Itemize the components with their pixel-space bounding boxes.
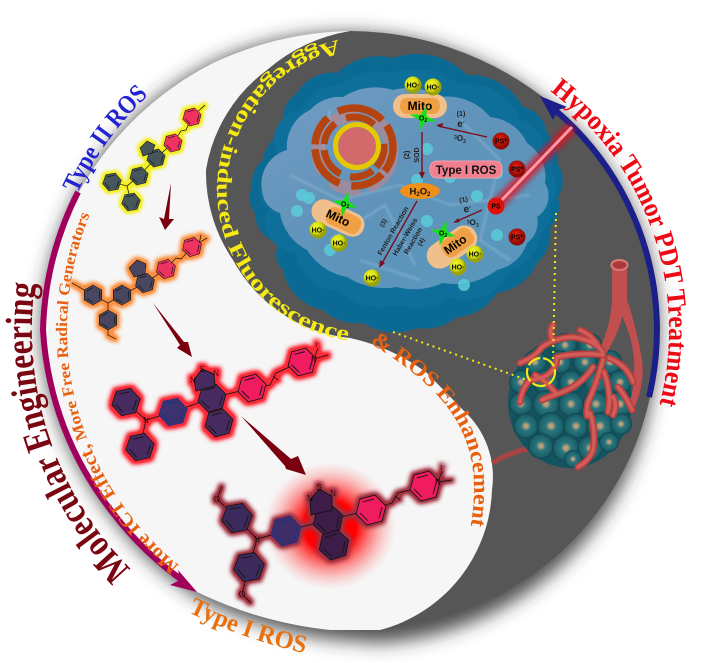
molecule 2: orange glow — [72, 235, 207, 339]
mitochondrion right — [422, 220, 482, 274]
heading: Hypoxia Tumor PDT Treatment: Hypoxia Tumor PDT Treatment — [550, 77, 686, 407]
photosensitizer spheres — [488, 132, 526, 246]
cell inner membrane — [259, 69, 556, 308]
molecule 4: deep red glow: N — [307, 494, 313, 503]
main artery — [598, 265, 643, 408]
H2O2 ellipse: 2 — [427, 192, 431, 198]
reaction labels: - — [463, 120, 465, 126]
hydroxyl radicals: HO· — [366, 276, 378, 282]
mitochondrion right: Mito — [441, 232, 469, 258]
molecule 3: red glow — [110, 342, 328, 465]
reaction labels: e — [457, 119, 463, 130]
arrow 2 — [153, 303, 192, 357]
reaction labels: e — [463, 204, 470, 216]
curved label: More ICT Effect, More Free Radical Generators: More ICT Effect, More Free Radical Generators — [56, 212, 179, 575]
molecule 3: red glow: S — [199, 365, 205, 374]
molecule 4: deep red glow — [214, 465, 452, 603]
reaction labels: Haber-Weiss — [392, 217, 419, 257]
molecule 4: deep red glow: N — [435, 478, 441, 487]
mitochondrion left — [308, 195, 368, 241]
superoxide stars: 2 — [424, 118, 427, 124]
blue arrow arc — [540, 96, 657, 397]
red laser beam — [496, 127, 572, 206]
hydroxyl radicals: HO· — [427, 84, 439, 92]
cyan vesicles — [291, 143, 503, 291]
molecule 3: red glow: N — [213, 369, 219, 378]
reaction labels: (2) — [404, 151, 411, 159]
photosensitizer spheres: PS — [491, 204, 501, 210]
molecule 3: red glow: I⁻ — [315, 342, 321, 349]
white yin half of disc — [43, 31, 493, 630]
hydroxyl radicals: HO· — [407, 82, 419, 90]
large red glow behind molecule 4 core — [264, 462, 396, 590]
heading: Molecular Engineering: Molecular Engineering — [6, 282, 130, 586]
Type I ROS pill — [430, 161, 502, 178]
reaction labels: (1) — [457, 111, 465, 118]
cell illustration — [250, 54, 572, 332]
molecule 4: deep red glow: N — [254, 535, 260, 544]
hydroxyl radicals — [310, 76, 484, 286]
molecule 3: red glow: N — [143, 416, 149, 425]
molecule 4: deep red glow: O — [239, 590, 245, 599]
superoxide stars: O — [419, 116, 424, 122]
mitochondrion left: Mito — [324, 206, 352, 230]
reaction labels: 2 — [463, 139, 466, 145]
mitochondrion top: Mito — [408, 99, 432, 113]
yellow curved heading: Aggregation-induced Fluorescence: Aggregation-induced Fluorescence — [216, 40, 348, 340]
reaction arrows — [379, 123, 487, 268]
photosensitizer spheres: PS* — [511, 234, 523, 242]
molecule 1: yellow glow — [101, 105, 205, 214]
reaction labels: (3) — [379, 218, 389, 228]
molecule 4: deep red glow: N — [330, 489, 336, 498]
superoxide stars — [329, 102, 459, 249]
magenta arrow arc — [43, 192, 197, 592]
hydroxyl radicals: HO· — [333, 240, 345, 248]
reaction labels: 2 — [476, 222, 479, 229]
nucleus and endoplasmic reticulum — [315, 108, 393, 189]
reaction labels: SOD — [414, 147, 421, 163]
reaction labels: 3 — [454, 135, 457, 141]
label: Type II ROS: Type II ROS — [62, 84, 146, 190]
mitochondrion top — [393, 94, 447, 118]
cytoplasm light veins — [290, 110, 530, 280]
cytoplasm — [261, 87, 549, 289]
photosensitizer spheres: PS* — [495, 138, 507, 146]
hydroxyl radicals: HO· — [469, 252, 481, 258]
hydroxyl radicals: HO· — [452, 264, 464, 272]
reaction labels: (4) — [417, 237, 427, 247]
reaction labels: O — [469, 218, 476, 227]
reaction labels: 3 — [467, 219, 470, 226]
artery opening — [612, 260, 628, 270]
reaction labels: (1) — [459, 196, 469, 205]
molecule 4: deep red glow: I⁻ — [440, 465, 446, 472]
H2O2 ellipse: O — [420, 186, 427, 198]
molecule 4: deep red glow: S — [316, 483, 322, 492]
yellow dotted callout lines — [393, 213, 556, 380]
photosensitizer spheres: PS* — [511, 166, 523, 174]
H2O2 ellipse — [400, 183, 440, 199]
superoxide stars: 2 — [346, 204, 349, 210]
branching vessels — [520, 325, 633, 467]
molecule 3: red glow: N — [311, 355, 317, 364]
tumour with blood vessels — [508, 260, 643, 468]
superoxide stars: O — [439, 230, 444, 238]
H2O2 ellipse: 2 — [416, 192, 420, 198]
yellow dashed focus circle — [527, 358, 555, 386]
H2O2 ellipse: H — [410, 186, 416, 198]
reaction labels: Fenton Reaction — [377, 206, 410, 257]
superoxide stars: 2 — [444, 233, 447, 239]
cell outer membrane — [250, 54, 563, 332]
superoxide stars: O — [341, 202, 346, 208]
hydroxyl radicals: HO· — [312, 228, 324, 234]
reaction labels: O — [457, 134, 463, 143]
orange curved heading: & ROS Enhancement: & ROS Enhancement — [372, 334, 484, 527]
molecule 4: deep red glow: O — [214, 495, 220, 504]
molecule 3: red glow: N — [190, 376, 196, 385]
label: Type I ROS: Type I ROS — [191, 597, 306, 652]
Type I ROS pill: Type I ROS — [436, 165, 497, 177]
dark yang half of disc — [200, 31, 658, 630]
arrow 3 — [241, 416, 306, 475]
arrow 1 — [159, 183, 174, 230]
reaction labels: Reaction — [403, 227, 424, 256]
tumour mass — [508, 333, 633, 468]
reaction labels: - — [468, 204, 471, 211]
vessel entering tumour — [492, 448, 532, 463]
reaction labels — [377, 111, 479, 257]
